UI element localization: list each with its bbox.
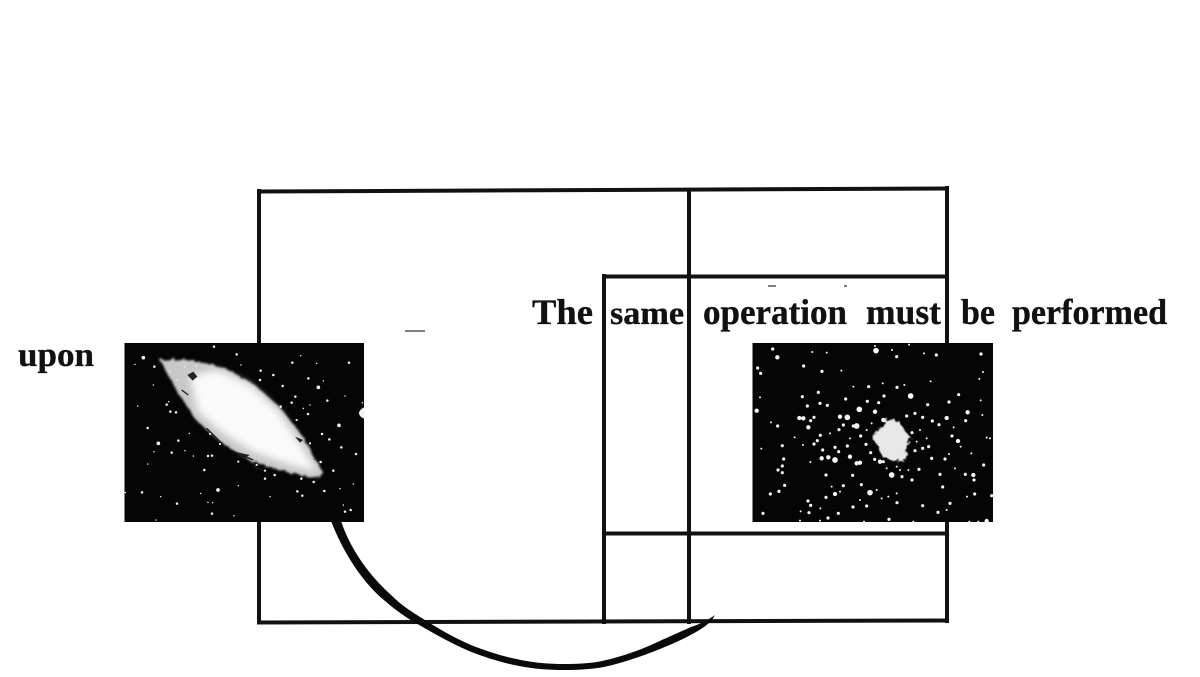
sentence text: The same operation must be performed: same [610, 296, 684, 332]
sentence text: The same operation must be performed: The [532, 292, 593, 332]
curved arrow line [331, 521, 715, 670]
sentence text: The same operation must be performed: operation [703, 292, 847, 332]
galaxy bright core [190, 370, 317, 472]
galaxy outer halo [160, 360, 323, 478]
sentence text: The same operation must be performed [532, 292, 1167, 332]
stars [125, 347, 362, 520]
sentence text: The same operation must be performed: be [961, 292, 995, 332]
image: globular star cluster [752, 343, 993, 522]
diagram: rectangle grid lines [259, 188, 947, 622]
sentence text: The same operation must be performed: must [866, 292, 941, 332]
image: elongated spiral galaxy [124, 343, 365, 522]
dust lanes [187, 372, 303, 458]
small print marks [405, 286, 847, 331]
cluster core [872, 419, 911, 461]
word: upon: upon [18, 337, 94, 374]
notch [359, 407, 365, 419]
sentence text: The same operation must be performed: performed [1012, 292, 1167, 332]
stars [757, 345, 992, 522]
